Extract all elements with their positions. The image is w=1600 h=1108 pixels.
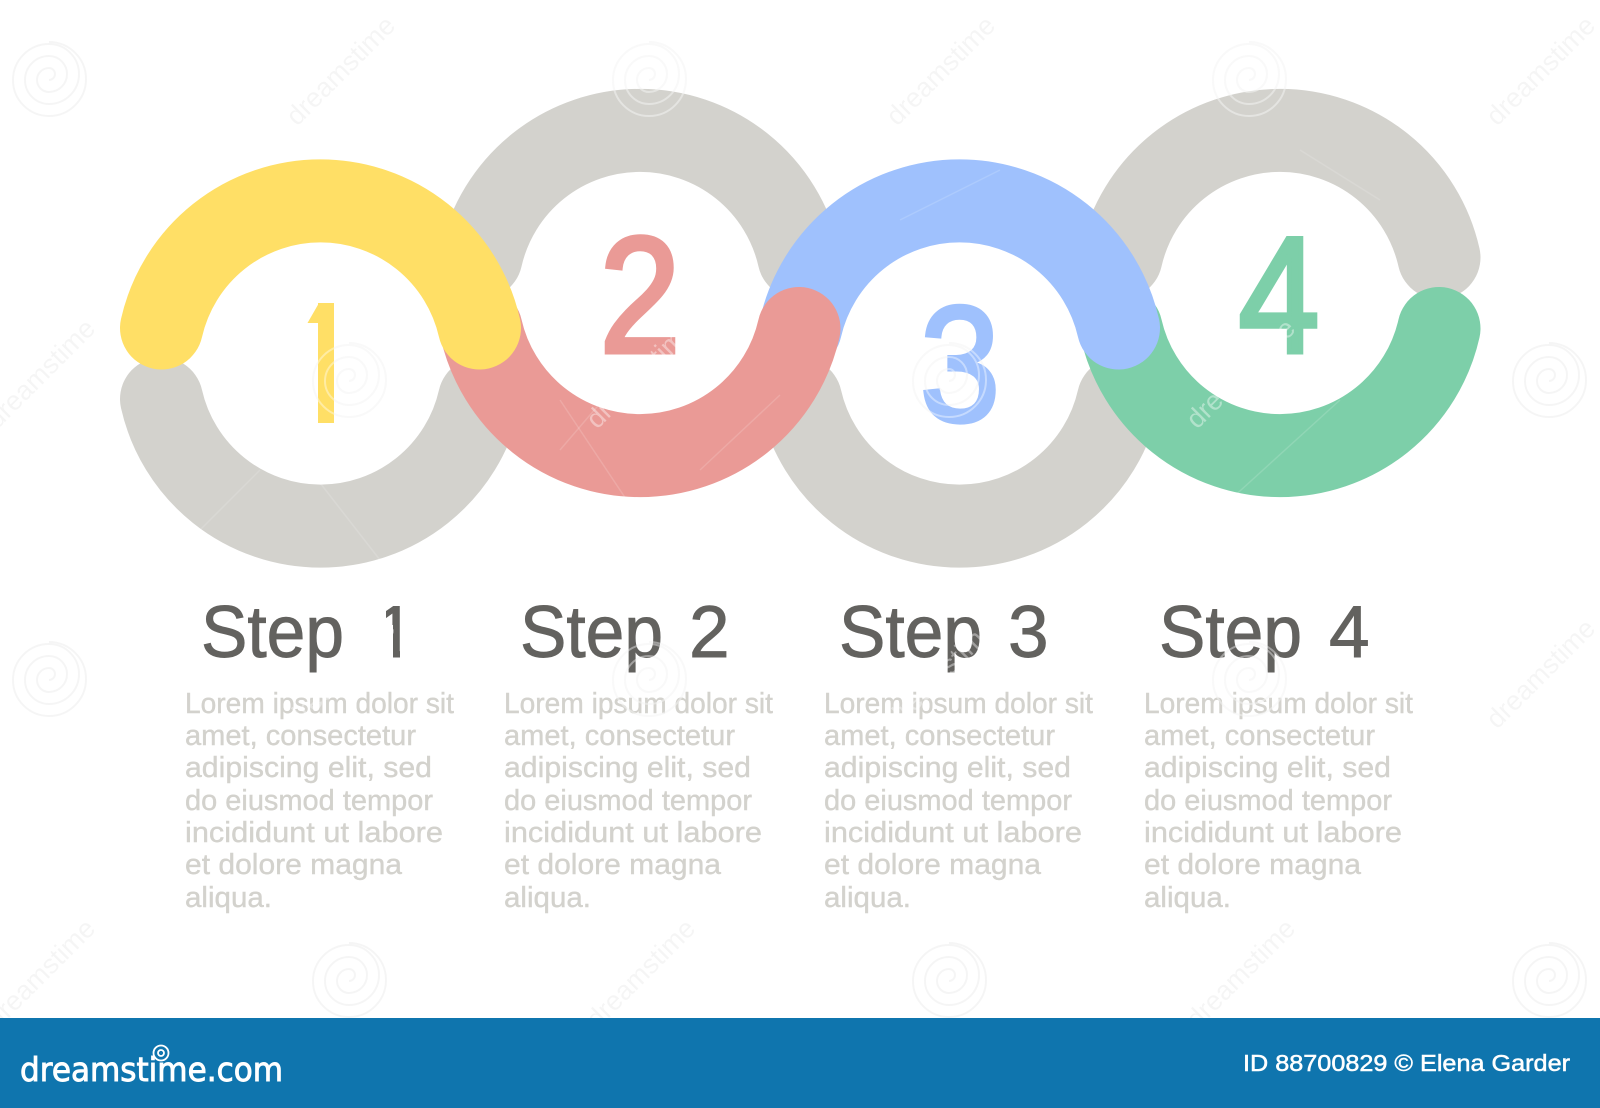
text: dreamstime [1180, 313, 1301, 434]
text block: step 3 description: adipiscing elit, sed [824, 752, 1071, 784]
text: dreamstime [1480, 10, 1600, 131]
text block: step 2 description: aliqua. [504, 882, 591, 914]
text block: step 2 description: do eiusmod tempor [504, 785, 752, 817]
text block: step 3 description: et dolore magna [824, 849, 1042, 881]
text block: step 1 description: Lorem ipsum dolor sit [185, 688, 454, 720]
text block: step 3 description: do eiusmod tempor [824, 785, 1072, 817]
number 3: 3 [920, 271, 1000, 456]
text: dreamstime [280, 10, 401, 131]
text block: step 1 description: do eiusmod tempor [185, 785, 433, 817]
text block: step 2 description: amet, consectetur [504, 720, 735, 752]
footer credit: ID 88700829 © Elena Garder [1243, 1050, 1570, 1076]
text block: step 4 description: et dolore magna [1144, 849, 1362, 881]
footer logo: dreamstime.com: dreamstime.com [20, 1050, 283, 1089]
text block: step 4 description: amet, consectetur [1144, 720, 1375, 752]
text block: step 1 description: aliqua. [185, 882, 272, 914]
text block: step 1 description: amet, consectetur [185, 720, 416, 752]
ring 3 upper arc: blue [800, 201, 1118, 328]
ring 3 lower arc: grey [800, 399, 1118, 526]
ring 2 lower arc: red [481, 328, 799, 456]
number 2: 2 [600, 202, 680, 387]
text block: step 2 description: incididunt ut labore [504, 817, 762, 849]
heading: Step 3: 3 [1008, 592, 1049, 673]
text: dreamstime [280, 613, 401, 734]
text: dreamstime [880, 10, 1001, 131]
heading: Step 2: 2 [689, 592, 730, 673]
text block: step 3 description: aliqua. [824, 882, 911, 914]
number 1 [308, 303, 334, 423]
heading: Step 3: Step [839, 592, 982, 673]
text block: step 1 description: adipiscing elit, sed [185, 752, 432, 784]
text: dreamstime [880, 613, 1001, 734]
ring 1 upper arc: yellow [162, 201, 480, 328]
text block: step 2 description: et dolore magna [504, 849, 722, 881]
ring 2 upper arc: grey [481, 130, 799, 258]
heading: Step 2: Step [520, 592, 663, 673]
text block: step 1 description [185, 688, 454, 914]
text block: step 1 description: incididunt ut labore [185, 817, 443, 849]
text block: step 4 description: Lorem ipsum dolor sit [1144, 688, 1413, 720]
text block: step 4 description: incididunt ut labore [1144, 817, 1402, 849]
heading: Step 1: 1 [374, 592, 415, 673]
ring 4 upper arc: grey [1121, 130, 1439, 258]
text: dreamstime [580, 913, 701, 1034]
text block: step 4 description: aliqua. [1144, 882, 1231, 914]
text block: step 2 description [504, 688, 773, 914]
ring 1 lower arc: grey [162, 399, 480, 526]
text block: step 3 description: incididunt ut labore [824, 817, 1082, 849]
text block: step 3 description [824, 688, 1093, 914]
heading: Step 4: Step [1159, 592, 1302, 673]
text: dreamstime [1180, 913, 1301, 1034]
footer bar [0, 1018, 1600, 1108]
text: dreamstime [1480, 613, 1600, 734]
text block: step 2 description: adipiscing elit, sed [504, 752, 751, 784]
text block: step 2 description: Lorem ipsum dolor sit [504, 688, 773, 720]
text block: step 1 description: et dolore magna [185, 849, 403, 881]
number 4: 4 [1239, 202, 1319, 387]
text block: step 3 description: amet, consectetur [824, 720, 1055, 752]
text: dreamstime [580, 313, 701, 434]
icon: spiral logo [154, 1046, 168, 1060]
ring 4 lower arc: green [1121, 328, 1439, 456]
heading: Step 4: 4 [1329, 592, 1370, 673]
text block: step 4 description: adipiscing elit, sed [1144, 752, 1391, 784]
text block: step 3 description: Lorem ipsum dolor sit [824, 688, 1093, 720]
number 1: 1 [275, 270, 370, 460]
chain of four interlocking rings [162, 130, 1439, 526]
heading: Step 1: Step [201, 592, 344, 673]
text block: step 4 description: do eiusmod tempor [1144, 785, 1392, 817]
text block: step 4 description [1144, 688, 1413, 914]
heading: Step 1 [204, 605, 400, 672]
